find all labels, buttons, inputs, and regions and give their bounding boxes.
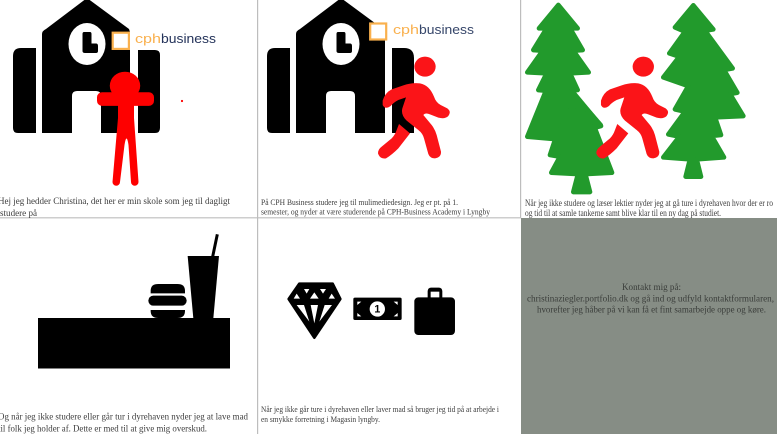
panel: forest [525,5,773,219]
figure: walking person [378,57,450,158]
icon: school building [267,0,414,133]
text: introduction: Hej jeg hedder Christina, det her er min skole som jeg til dagligt [0,197,230,207]
text: work [261,404,500,424]
red dot [181,100,183,102]
icon: pine trees [527,5,743,192]
icon: school building [13,0,160,133]
text: forest [525,198,773,219]
text: forest: og tid til at samle tankerne samt blive klar til en ny dag på studiet. [525,208,721,219]
logo: cphbusiness [113,32,216,49]
figure: walking person [596,57,668,158]
icon: bag [414,288,455,335]
icon: banknote: 1 [374,304,380,316]
text: introduction [0,197,230,219]
icon: burger and drink [148,234,219,318]
panel: introduction [0,0,230,219]
panel: cooking [0,234,248,434]
icons: diamond, banknote, bag [289,284,455,338]
panel: contact text [527,282,774,316]
icon: banknote [353,298,402,320]
text: introduction: studere på [0,208,38,219]
logo: cphbusiness: cph [393,23,419,37]
text: study: På CPH Business studere jeg til mulimediedesign. Jeg er pt. på 1. [261,197,458,207]
text: cooking [0,412,248,434]
text: study: semester, og nyder at være studerende på CPH-Business Academy i Lyngby [261,206,491,216]
text: cooking: Og når jeg ikke studere eller går tur i dyrehaven nyder jeg at lave mad [0,412,248,422]
figure: standing person [97,72,154,186]
icon: table [38,318,230,368]
panel: work [261,284,500,424]
text: work: en smykke forretning i Magasin lyngby. [261,414,380,424]
panel: contact background [521,218,777,434]
text: study [261,197,491,216]
panel: contact text: Kontakt mig på: [622,282,681,293]
text: work: Når jeg ikke går ture i dyrehaven eller laver mad så bruger jeg tid på at arbejde i [261,404,500,414]
logo: cphbusiness [370,23,474,40]
logo: cphbusiness: cph [135,32,161,46]
panel: study [261,0,491,216]
panel: contact text: hvorefter jeg håber på vi kan få et fint samarbejde oppe og køre. [537,304,766,316]
icon: diamond [289,284,340,338]
logo: cphbusiness: business [419,23,474,37]
logo: cphbusiness: business [161,32,216,46]
